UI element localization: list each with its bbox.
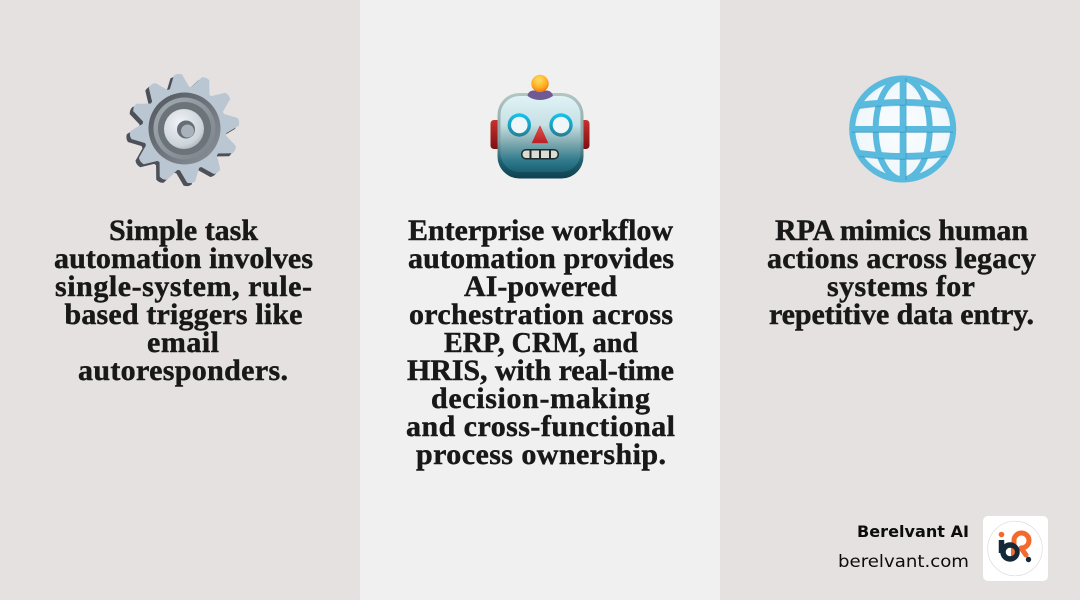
text: enterprise workflow description: orchestration across bbox=[409, 298, 673, 331]
text: RPA description: systems for bbox=[827, 270, 975, 303]
text: enterprise workflow description: AI-powered bbox=[464, 270, 617, 303]
text: enterprise workflow description: Enterprise workflow bbox=[408, 214, 673, 247]
icon: robot bbox=[490, 75, 590, 178]
text: simple task automation description: automation involves bbox=[54, 242, 313, 275]
text: enterprise workflow description: and cross-functional bbox=[406, 410, 675, 443]
text: simple task automation description bbox=[54, 214, 313, 387]
text: enterprise workflow description: ERP, CRM, and bbox=[444, 328, 638, 359]
brand name: Berelvant AI bbox=[857, 522, 969, 541]
text: enterprise workflow description: automation provides bbox=[408, 242, 674, 275]
icon: gear bbox=[125, 73, 240, 187]
text: simple task automation description: email bbox=[147, 326, 219, 359]
text: enterprise workflow description: process ownership. bbox=[416, 438, 666, 471]
text: enterprise workflow description bbox=[406, 214, 675, 471]
text: enterprise workflow description: HRIS, with real-time bbox=[407, 354, 674, 387]
text: RPA description: RPA mimics human bbox=[775, 214, 1028, 247]
text: RPA description: repetitive data entry. bbox=[769, 298, 1034, 331]
text: simple task automation description: single-system, rule- bbox=[55, 270, 312, 303]
panel: robotic process automation bbox=[720, 0, 1080, 600]
text: simple task automation description: based triggers like bbox=[64, 298, 302, 331]
text: simple task automation description: Simple task bbox=[109, 214, 258, 247]
icon: globe bbox=[850, 76, 956, 182]
text: RPA description bbox=[767, 214, 1036, 331]
text: RPA description: actions across legacy bbox=[767, 242, 1036, 275]
panel: simple task automation bbox=[0, 0, 360, 600]
logo: Berelvant badge bbox=[983, 516, 1048, 581]
text: simple task automation description: autoresponders. bbox=[78, 354, 288, 387]
text: enterprise workflow description: decision-making bbox=[431, 382, 650, 415]
brand url: berelvant.com bbox=[838, 552, 969, 572]
panel: enterprise workflow automation bbox=[360, 0, 720, 600]
